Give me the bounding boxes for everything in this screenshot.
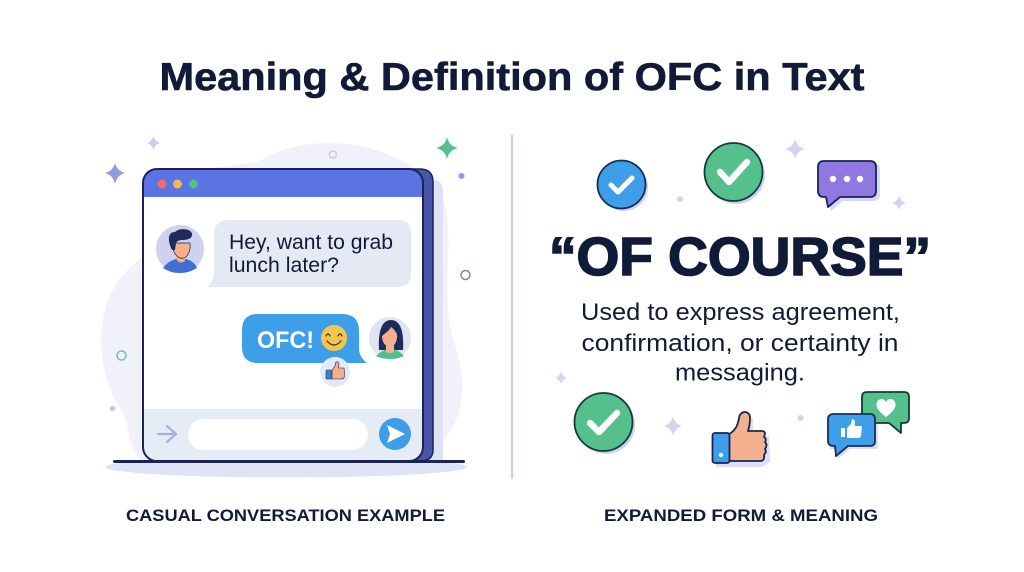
- incoming message bubble: Hey, want to grab: [229, 231, 393, 254]
- avatar: man: [156, 225, 204, 273]
- sparkle decorations: [105, 136, 470, 411]
- definition text: messaging.: [675, 360, 805, 386]
- incoming message bubble: lunch later?: [229, 254, 339, 277]
- icon: thumbs up: [712, 412, 770, 467]
- top icon row: [598, 139, 906, 211]
- chat window: [143, 169, 423, 461]
- window dots: [158, 180, 198, 188]
- title: Meaning & Definition of OFC in Text: [160, 56, 865, 99]
- outgoing message bubble: OFC!: [257, 327, 314, 354]
- sparkles: [555, 371, 804, 436]
- icon: green check large: [574, 393, 635, 454]
- avatar: woman: [369, 317, 411, 359]
- outgoing message bubble: [242, 314, 367, 363]
- send button: [379, 418, 411, 450]
- ground line: [113, 460, 465, 463]
- panel: casual conversation example: [101, 136, 470, 478]
- title bar: [143, 169, 423, 197]
- window back panel: [400, 169, 433, 461]
- heading: of course: “OF COURSE”: [549, 226, 931, 286]
- caption: expanded form and meaning: EXPANDED FORM & MEANING: [604, 507, 878, 525]
- icon: like and heart bubbles: [828, 392, 909, 459]
- bottom icon row: [555, 371, 909, 467]
- sparkles: [677, 139, 906, 210]
- icon: typing speech bubble: [818, 161, 880, 211]
- panel: expanded form and meaning: [549, 139, 931, 467]
- input bar: [143, 409, 423, 461]
- icon: blue check: [598, 160, 648, 211]
- window drop shadow: [430, 180, 443, 460]
- definition text: [581, 299, 900, 386]
- window border: [143, 169, 423, 461]
- definition text: confirmation, or certainty in: [582, 330, 898, 357]
- background blob: [101, 143, 462, 460]
- center divider: [511, 135, 513, 479]
- definition text: Used to express agreement,: [581, 299, 900, 326]
- thumbs-up reaction: [320, 357, 350, 387]
- icon: green check: [704, 143, 765, 204]
- caption: casual conversation example: CASUAL CONVERSATION EXAMPLE: [126, 507, 445, 525]
- smiley emoji: [321, 325, 347, 351]
- incoming message bubble: [207, 220, 411, 287]
- ground shadow: [105, 456, 467, 478]
- text input: [188, 419, 368, 450]
- back arrow icon: [158, 426, 176, 442]
